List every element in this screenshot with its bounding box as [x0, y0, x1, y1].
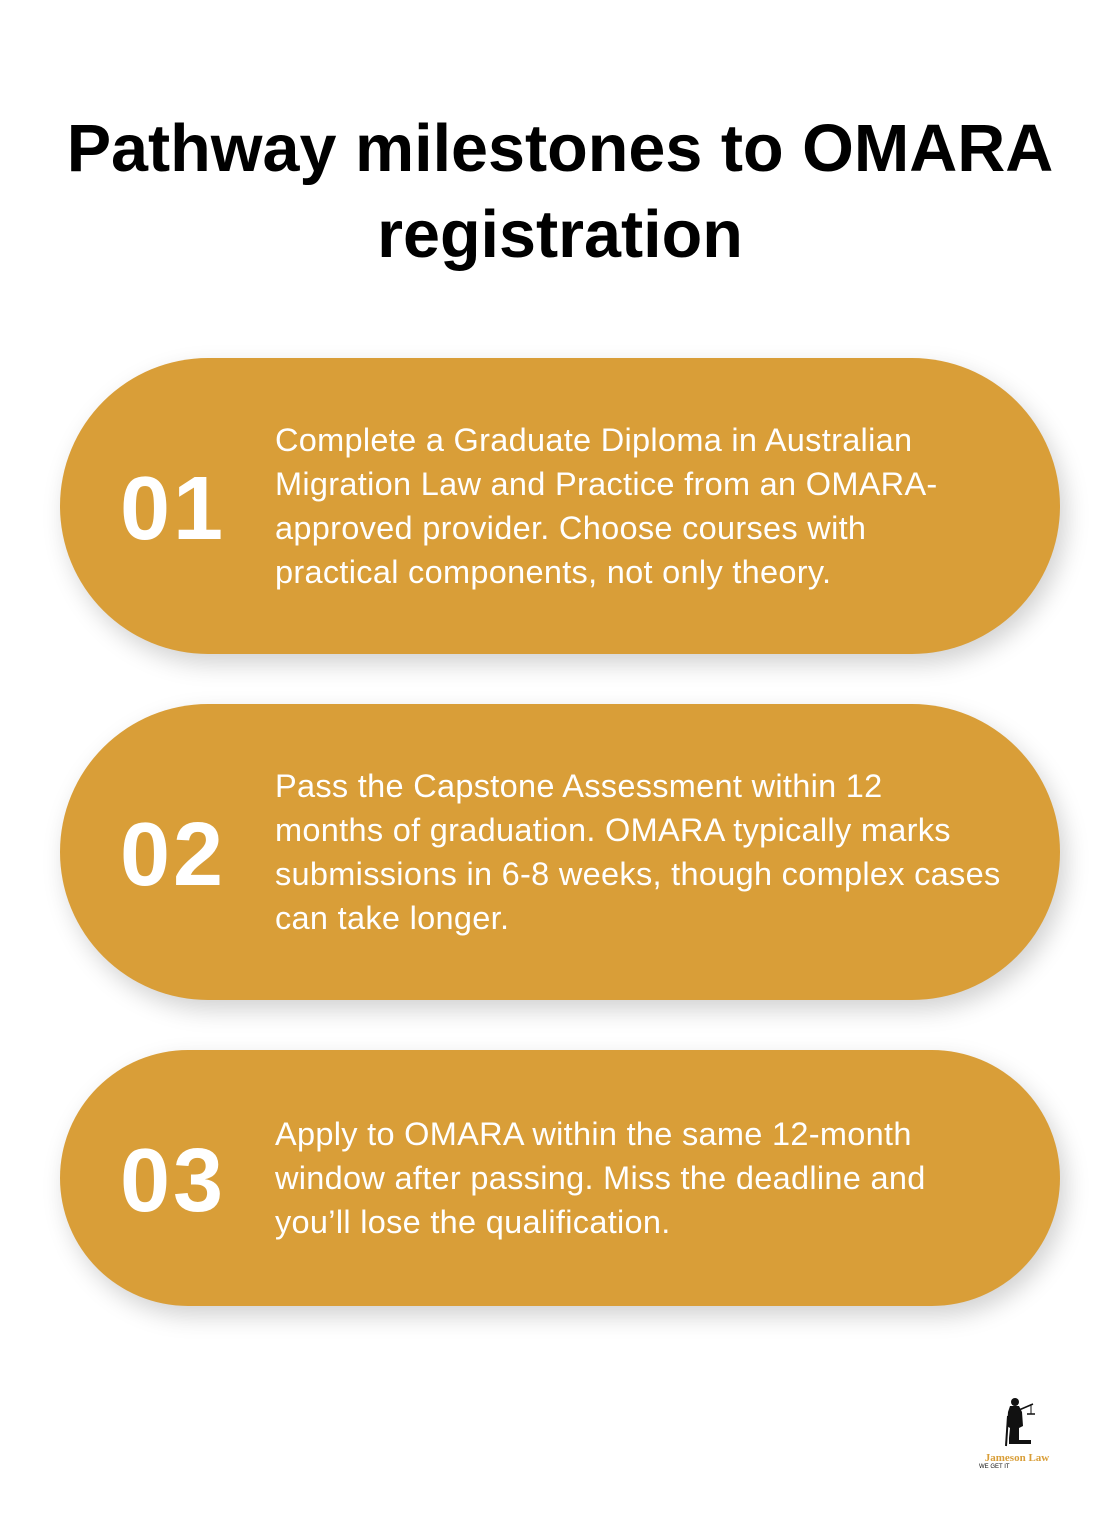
text 02: can take longer. [275, 900, 509, 936]
text 01: Complete a Graduate Diploma in Australian [275, 422, 912, 458]
logo [979, 1398, 1050, 1470]
text 02 [275, 768, 1001, 936]
title: Pathway milestones to OMARA [67, 112, 1053, 186]
text 03: you’ll lose the qualification. [275, 1204, 671, 1240]
text 03 [275, 1116, 926, 1240]
panel: step 01 [60, 358, 1060, 654]
logo: WE GET IT [979, 1464, 1010, 1470]
panel: step 03 [60, 1050, 1060, 1306]
number 01: 01 [120, 459, 226, 559]
title: registration [377, 198, 743, 272]
text 03: window after passing. Miss the deadline and [275, 1160, 926, 1196]
text 02: submissions in 6-8 weeks, though complex cases [275, 856, 1001, 892]
text 02: months of graduation. OMARA typically marks [275, 812, 951, 848]
panel: step 02 [60, 704, 1060, 1000]
text 01: approved provider. Choose courses with [275, 510, 866, 546]
number 03: 03 [120, 1131, 226, 1231]
text 01 [275, 422, 938, 590]
text 03: Apply to OMARA within the same 12-month [275, 1116, 912, 1152]
text 02: Pass the Capstone Assessment within 12 [275, 768, 883, 804]
title [67, 112, 1053, 272]
text 01: practical components, not only theory. [275, 554, 831, 590]
logo text: Jameson Law [985, 1452, 1049, 1464]
number 02: 02 [120, 805, 226, 905]
text 01: Migration Law and Practice from an OMARA- [275, 466, 938, 502]
icon: lady justice [1005, 1398, 1035, 1446]
